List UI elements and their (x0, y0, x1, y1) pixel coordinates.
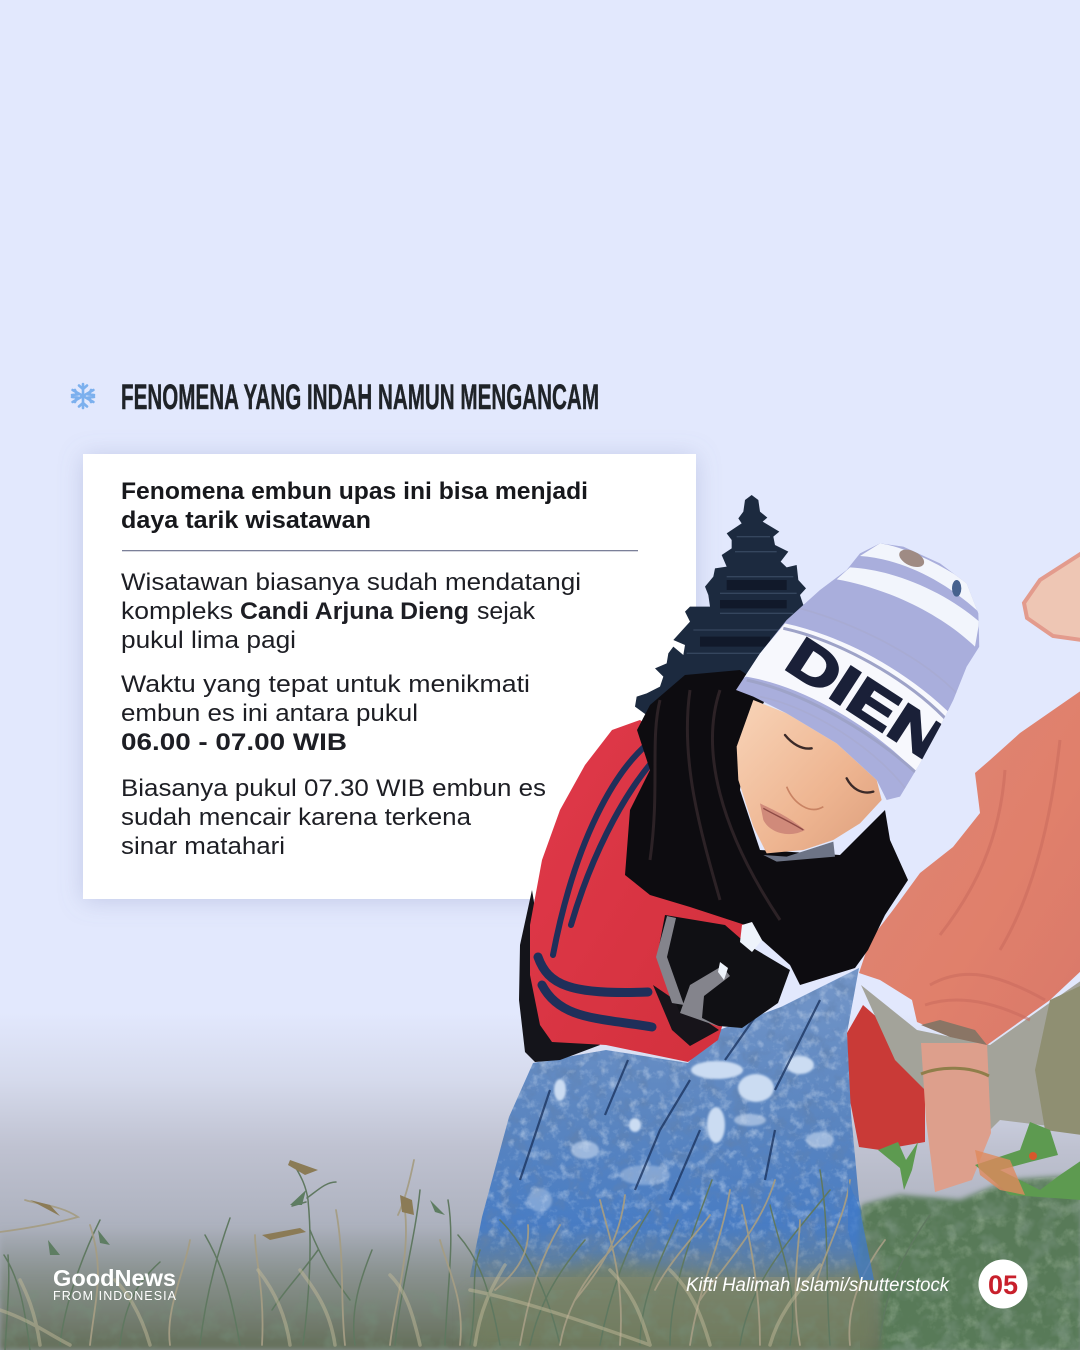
text block: visitors: pukul lima pagi (121, 627, 296, 654)
pink shirt (859, 690, 1080, 1045)
grass blur band (0, 1225, 880, 1350)
grey cloth and trousers (861, 980, 1080, 1135)
text block: best time: embun es ini antara pukul (121, 700, 418, 727)
text block: melting: Biasanya pukul 07.30 WIB embun es (121, 775, 546, 802)
leaf sprigs (878, 1122, 1080, 1200)
icon: snowflake (72, 384, 94, 408)
tyre cracks (520, 1000, 820, 1200)
text block: melting (121, 775, 546, 860)
logo: GoodNews from Indonesia: GoodNews (53, 1265, 176, 1291)
heading text: FENOMENA YANG INDAH NAMUN MENGANCAM (121, 378, 599, 417)
page number badge: 05 (988, 1270, 1018, 1300)
eyes, nose and lips (785, 735, 873, 793)
dark inner sleeve (653, 985, 719, 1046)
red cloth (847, 1005, 925, 1150)
face mask strap (763, 842, 835, 862)
logo: GoodNews from Indonesia (53, 1265, 177, 1303)
frost patches (528, 1056, 834, 1212)
jacket stripes (538, 742, 652, 1027)
carrot foliage bed (850, 1175, 1080, 1350)
section heading (72, 378, 599, 417)
beanie (733, 540, 983, 803)
photo credit: Kifti Halimah Islami/shutterstock (686, 1275, 950, 1296)
vegetation foreground (0, 1122, 1080, 1350)
black glove (656, 915, 790, 1028)
woman in DIENG beanie (519, 540, 983, 1062)
text block: best time (121, 671, 530, 756)
farmer in pink shirt (847, 553, 1080, 1192)
face (737, 700, 882, 862)
red jacket (530, 720, 745, 1062)
frosted tyre (470, 968, 877, 1277)
page number badge (978, 1260, 1028, 1308)
text block: melting: sinar matahari (121, 833, 285, 860)
farmer arm (921, 1043, 991, 1192)
card title: Fenomena embun upas ini bisa menjadi (121, 478, 588, 505)
text block: best time: Waktu yang tepat untuk menikmati (121, 671, 530, 698)
long black hair (625, 670, 908, 985)
text block: visitors (121, 569, 581, 654)
text block: visitors: Wisatawan biasanya sudah mendatangi (121, 569, 581, 596)
grass blades (0, 1160, 930, 1350)
beanie lettering: DIEN (776, 625, 955, 772)
text block: best time: 06.00 - 07.00 WIB (121, 729, 347, 756)
text block: visitors: kompleks (121, 598, 233, 625)
text block: melting: sudah mencair karena terkena (121, 804, 471, 831)
temple silhouette (635, 495, 815, 720)
farmer hat brim (1024, 553, 1080, 640)
card title: daya tarik wisatawan (121, 507, 371, 534)
black bag (519, 890, 600, 1062)
panel: white text card (83, 454, 696, 899)
logo: GoodNews from Indonesia: FROM INDONESIA (53, 1289, 177, 1303)
card title (121, 478, 588, 534)
text block: visitors: sejak (477, 598, 536, 625)
text block: visitors: Candi Arjuna Dieng (240, 598, 469, 625)
